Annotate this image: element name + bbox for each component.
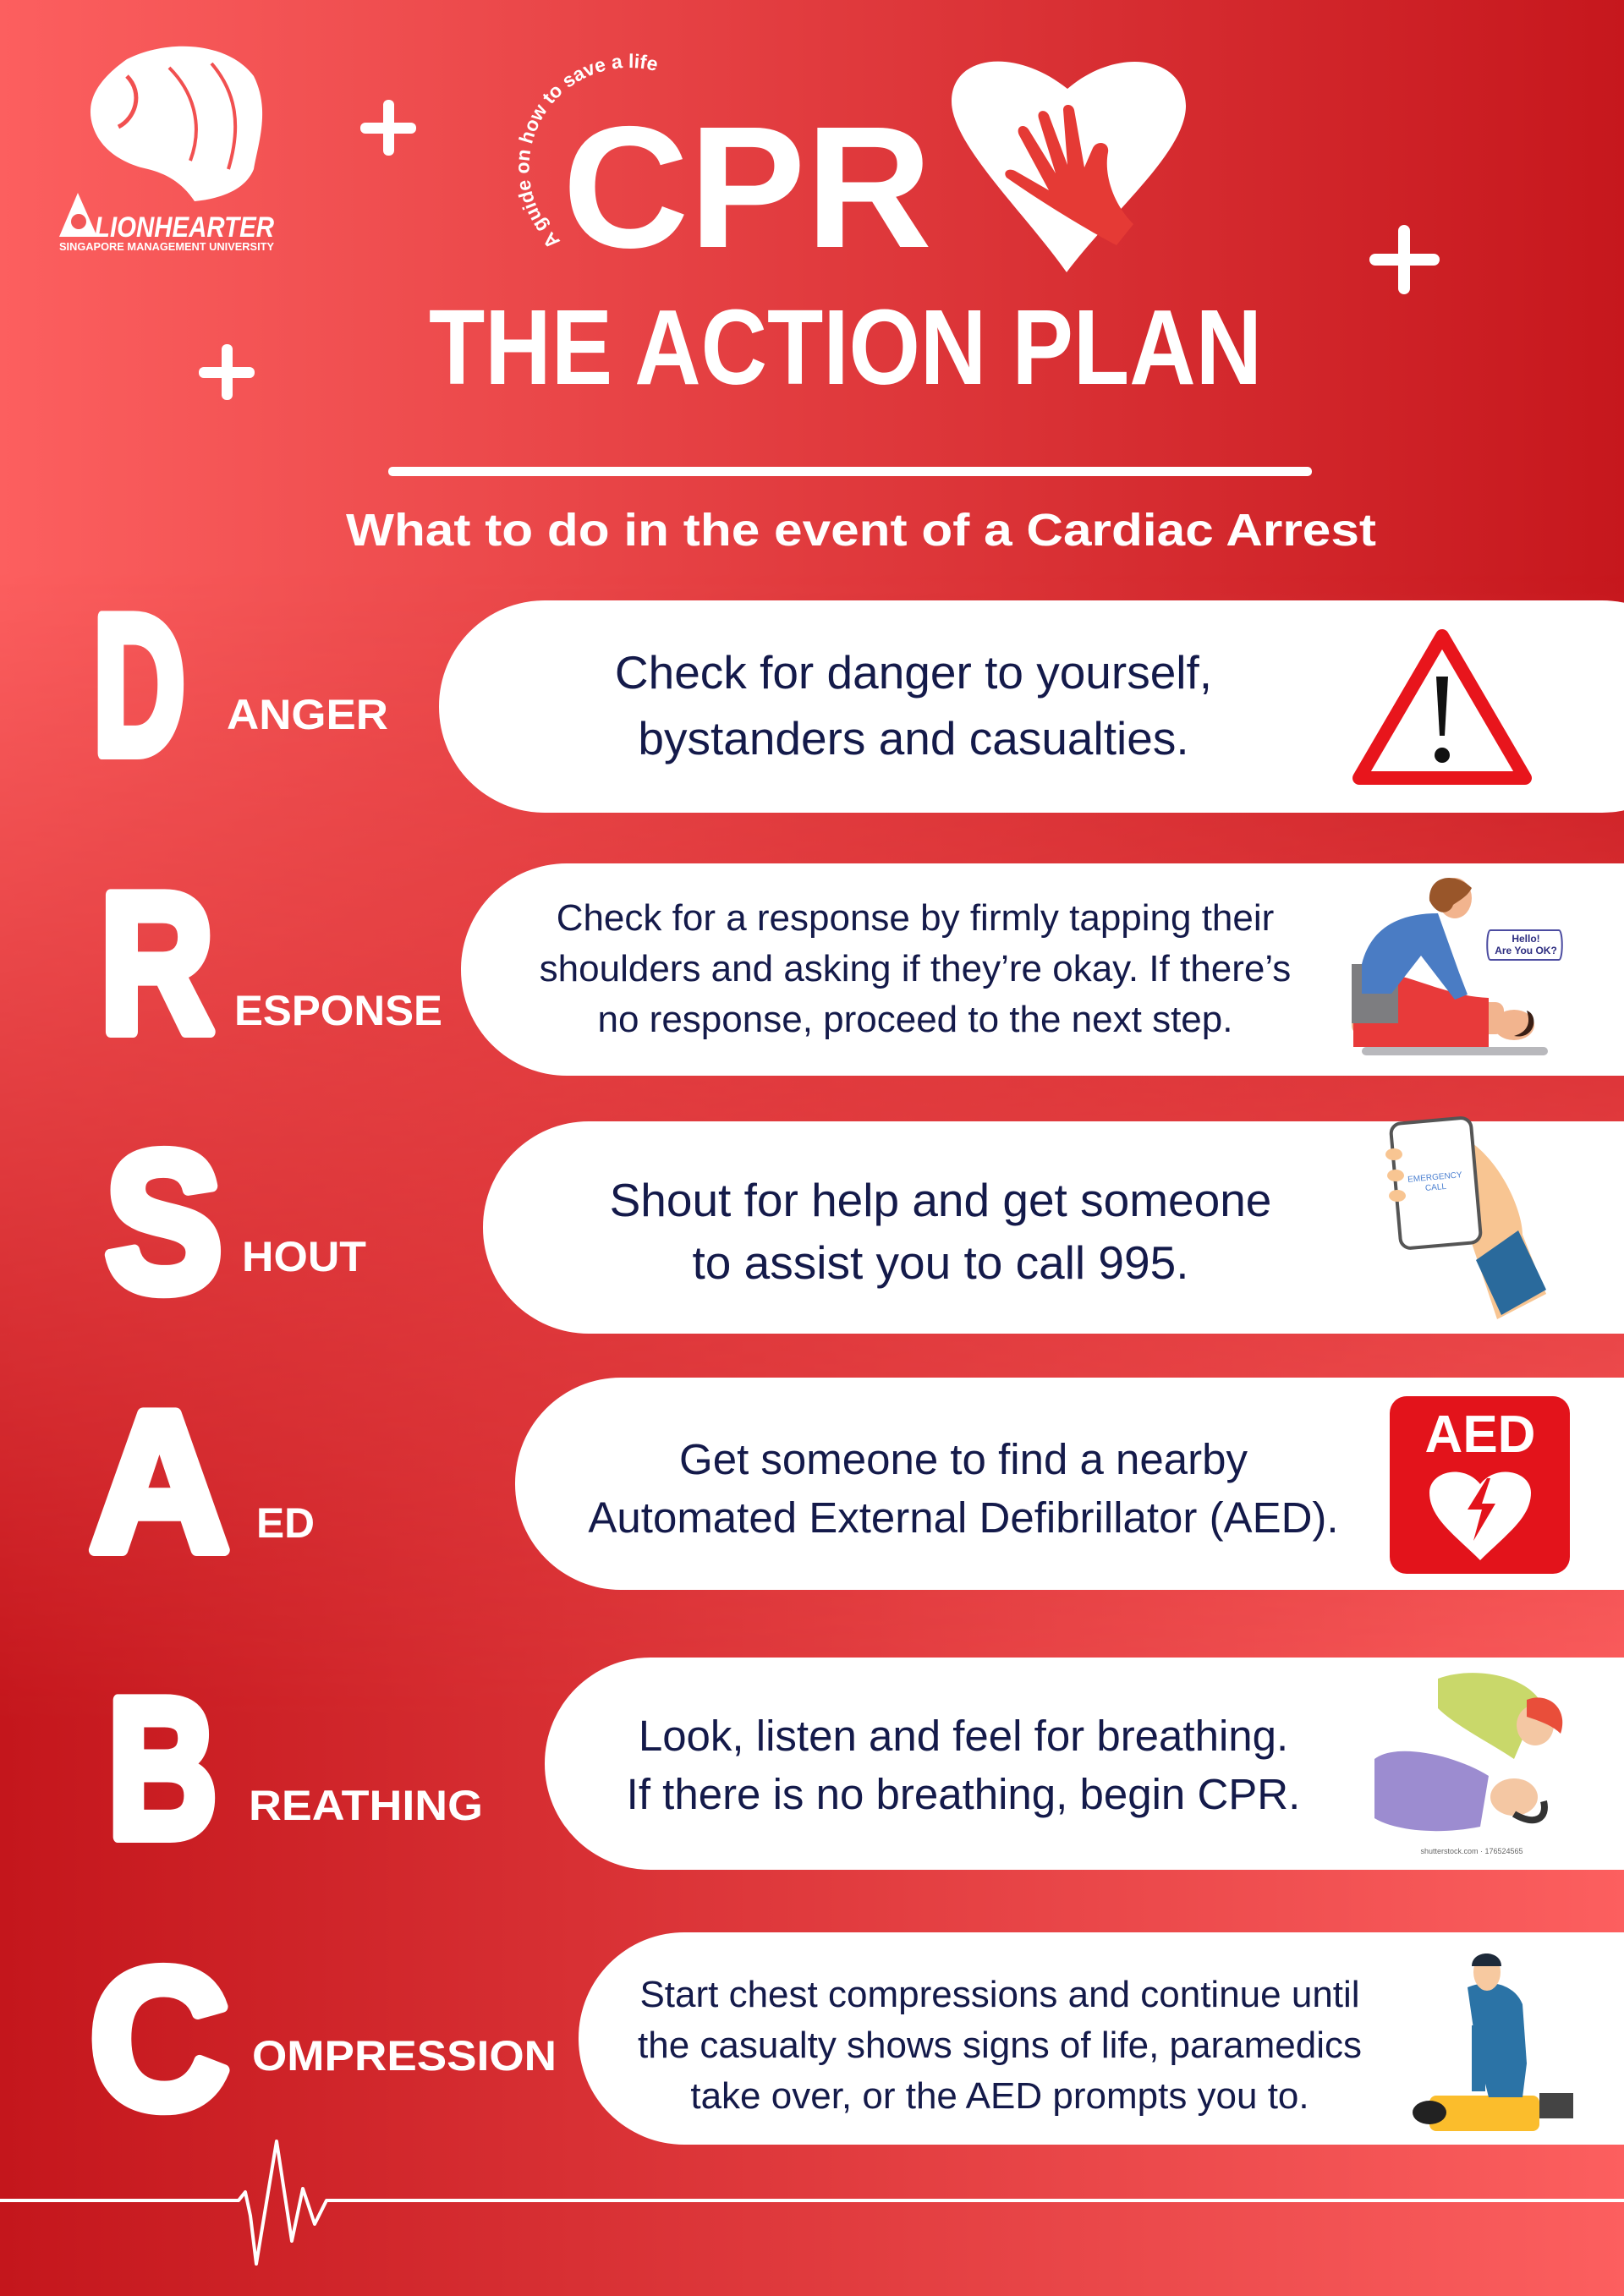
- letter label: C: [90, 1927, 557, 2150]
- letter label: C: OMPRESSION: [252, 2032, 557, 2080]
- letter label: S: [105, 1110, 366, 1333]
- letter label: R: R: [100, 852, 214, 1074]
- pill: aed: Automated External Defibrillator (AED).: [588, 1493, 1339, 1542]
- letter label: R: ESPONSE: [234, 987, 442, 1034]
- title: CPR: CPR: [562, 90, 932, 284]
- icon: chest compression illustration: [1413, 1954, 1573, 2131]
- row: Danger: [93, 573, 1624, 813]
- logo: Lionhearter SMU: LIONHEARTER: [95, 211, 274, 244]
- letter label: B: B: [107, 1657, 217, 1879]
- row: AED: [90, 1370, 1624, 1592]
- row: Shout: [105, 1110, 1624, 1334]
- letter label: B: [107, 1657, 483, 1879]
- pill: compression: [579, 1932, 1624, 2145]
- icon: AED sign: AED: [1425, 1406, 1535, 1464]
- icon: phone in hand: EMERGENCY: [1407, 1170, 1462, 1185]
- icon: warning triangle: [1359, 636, 1525, 778]
- title: THE ACTION PLAN: THE ACTION PLAN: [429, 288, 1262, 407]
- icon: plus 3: [1369, 225, 1440, 294]
- pill: danger: bystanders and casualties.: [638, 712, 1189, 764]
- letter label: D: ANGER: [227, 691, 388, 738]
- pill: aed: Get someone to find a nearby: [679, 1435, 1248, 1483]
- letter label: D: [93, 573, 388, 796]
- subtitle: What to do in the event of a Cardiac Arrest: [346, 505, 1376, 556]
- icon: AED sign: [1390, 1396, 1570, 1574]
- row: Breathing: [107, 1657, 1624, 1879]
- letter label: A: A: [90, 1370, 229, 1592]
- icon: heart with hand: [952, 62, 1186, 272]
- logo: Lionhearter SMU: SINGAPORE MANAGEMENT UNIVERSITY: [59, 240, 274, 253]
- pill: response: Check for a response by firmly tapping their: [557, 897, 1274, 939]
- pill: response: [461, 863, 1624, 1076]
- pill: compression: Start chest compressions and continue until: [639, 1974, 1360, 2015]
- icon: checking response illustration: [1352, 878, 1562, 1055]
- icon: phone in hand: [1385, 1117, 1546, 1319]
- pill: danger: [439, 600, 1624, 813]
- letter label: B: REATHING: [249, 1782, 483, 1829]
- icon: plus 1: [360, 100, 416, 156]
- pill: danger: Check for danger to yourself,: [615, 646, 1212, 699]
- icon: phone in hand: CALL: [1425, 1182, 1447, 1193]
- letter label: R: [100, 852, 442, 1074]
- letter label: S: S: [105, 1110, 222, 1333]
- pill: breathing: [545, 1658, 1624, 1870]
- letter label: D: D: [93, 573, 185, 796]
- pill: shout: to assist you to call 995.: [693, 1236, 1188, 1289]
- icon: checking response illustration: Are You OK?: [1495, 945, 1557, 956]
- row: Response: [100, 852, 1624, 1076]
- pill: response: no response, proceed to the next step.: [598, 999, 1232, 1040]
- letter label: S: HOUT: [242, 1233, 366, 1280]
- pill: shout: Shout for help and get someone: [610, 1174, 1271, 1226]
- icon: breathing check illustration: shutterstock.com · 176524565: [1420, 1847, 1523, 1855]
- letter label: A: ED: [256, 1499, 315, 1547]
- pill: compression: take over, or the AED prompts you to.: [690, 2075, 1309, 2117]
- logo: Lionhearter SMU: [59, 47, 274, 253]
- icon: plus 2: [199, 344, 255, 400]
- letter label: C: C: [90, 1927, 229, 2150]
- letter label: A: [90, 1370, 315, 1592]
- curved tagline: A guide on how to save a life: [518, 53, 657, 247]
- pill: breathing: If there is no breathing, begin CPR.: [627, 1770, 1300, 1818]
- icon: breathing check illustration: [1374, 1673, 1562, 1855]
- pill: aed: [515, 1378, 1624, 1590]
- pill: breathing: Look, listen and feel for breathing.: [639, 1712, 1288, 1760]
- row: Compression: [90, 1927, 1624, 2150]
- icon: checking response illustration: Hello!: [1512, 933, 1540, 945]
- pill: shout: [483, 1117, 1624, 1334]
- heartbeat line: [0, 2141, 1624, 2264]
- pill: compression: the casualty shows signs of life, paramedics: [638, 2025, 1362, 2066]
- pill: response: shoulders and asking if they’re okay. If there’s: [540, 948, 1291, 989]
